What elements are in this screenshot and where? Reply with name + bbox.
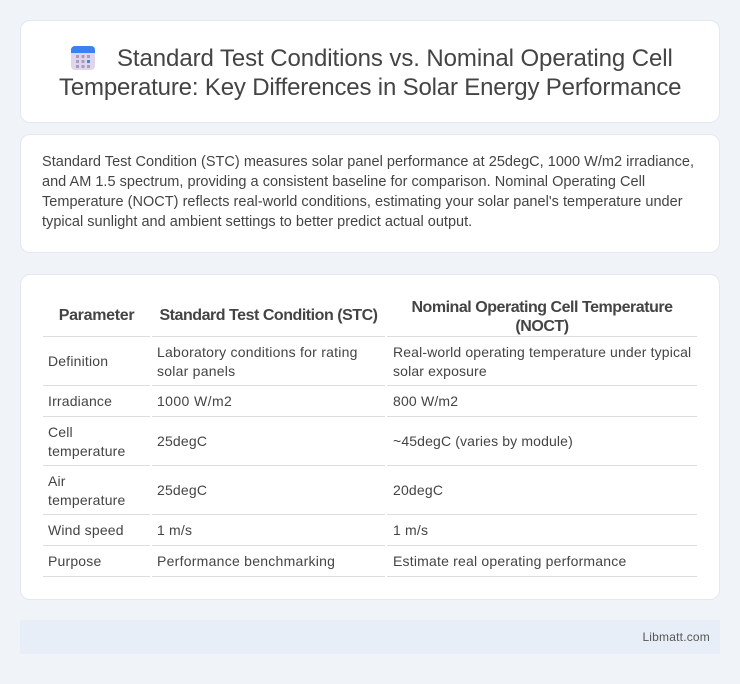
row: definition: Definition (48, 353, 108, 369)
intro text: Temperature (NOCT) reflects real-world conditions, estimating your solar panel's temperature under (42, 194, 683, 210)
intro text: typical sunlight and ambient settings to better predict actual output. (42, 214, 472, 230)
intro text: and AM 1.5 spectrum, providing a consistent baseline for comparison. Nominal Operating Cell (42, 174, 645, 190)
row: air temperature (48, 473, 125, 508)
table header: STC: Standard Test Condition (STC) (159, 307, 378, 324)
text: solar panels (157, 363, 235, 379)
footer: source: Libmatt.com (642, 630, 710, 644)
title line 2: Temperature: Key Differences in Solar Energy Performance (59, 74, 681, 101)
table header: NOCT (411, 299, 673, 335)
row: irradiance: Irradiance (48, 393, 112, 409)
panel: intro (20, 134, 720, 253)
text: 25degC (157, 482, 207, 498)
row: air temperature: Air (48, 473, 66, 489)
panel: comparison table (20, 274, 720, 600)
text: 1000 W/m2 (157, 393, 232, 409)
text: Real-world operating temperature under typical (393, 344, 691, 360)
text: Estimate real operating performance (393, 553, 626, 569)
text: ~45degC (varies by module) (393, 433, 573, 449)
table header: NOCT: (NOCT) (515, 318, 569, 335)
intro text: Standard Test Condition (STC) measures solar panel performance at 25degC, 1000 W/m2 irradiance, (42, 154, 694, 170)
row: cell temperature (48, 424, 125, 459)
text: 1 m/s (393, 522, 428, 538)
text: 800 W/m2 (393, 393, 458, 409)
row: air temperature: temperature (48, 492, 125, 508)
text: 20degC (393, 482, 443, 498)
panel: header (20, 20, 720, 123)
text: solar exposure (393, 363, 487, 379)
text: Performance benchmarking (157, 553, 335, 569)
text: 25degC (157, 433, 207, 449)
row: wind speed: Wind speed (48, 522, 124, 538)
title line 1: Standard Test Conditions vs. Nominal Operating Cell (117, 45, 673, 72)
intro text (42, 154, 694, 230)
table header: parameter: Parameter (59, 307, 134, 324)
table header: NOCT: Nominal Operating Cell Temperature (411, 299, 673, 316)
icon: calendar (71, 46, 95, 70)
footer bar (20, 620, 720, 654)
row: purpose: Purpose (48, 553, 101, 569)
row: cell temperature: Cell (48, 424, 73, 440)
text: 1 m/s (157, 522, 192, 538)
row: cell temperature: temperature (48, 443, 125, 459)
text: Laboratory conditions for rating (157, 344, 358, 360)
